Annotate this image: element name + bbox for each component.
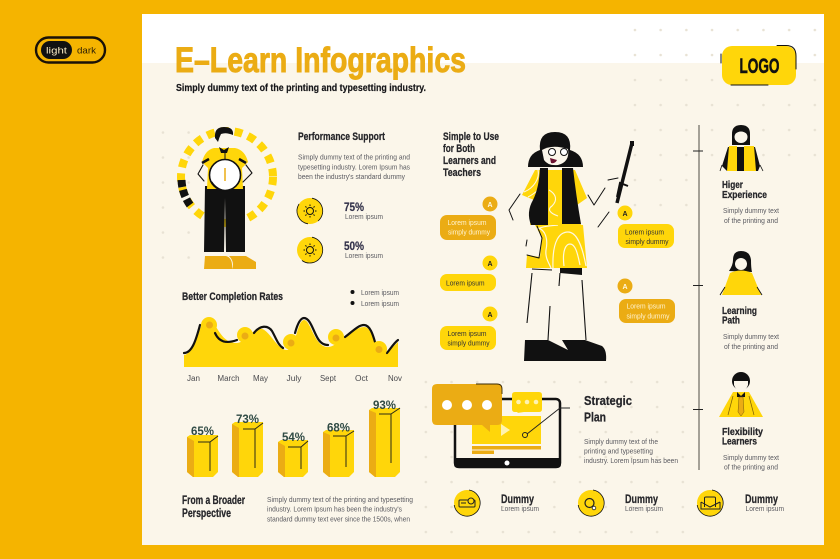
callout: left top [440,196,498,240]
callout: left middle: Lorem ipsum [446,278,485,288]
dummy label 2 [625,494,663,513]
heading [722,306,757,326]
arms [509,194,542,258]
small bubble [512,392,542,413]
main panel [142,14,824,545]
description: Simply dummy text [723,206,779,215]
performance support text: typesetting industry. Lorem Ipsum has [298,162,410,172]
callout: left bottom: simply dummy [448,338,490,348]
vest [529,168,581,225]
description [723,453,779,472]
broader perspective heading [182,495,245,520]
bar 65 percent: 65% [191,424,214,438]
logo badge: LOGO [740,55,780,78]
trousers [204,186,245,252]
callout: left middle: A [488,261,493,268]
light dark toggle [36,38,105,62]
broader perspective text [267,495,413,524]
simple to use heading [443,131,499,179]
heading: Experience [722,190,767,201]
heading: Learning [722,306,757,317]
bar 68 percent [323,420,354,477]
heading [722,180,767,201]
light dark toggle: light [46,46,67,56]
callout: left top: simply dummy [448,228,490,236]
chart month labels: Oct [355,374,369,383]
description: Simply dummy text [723,332,779,341]
pointer line [527,408,570,434]
performance support text: Simply dummy text of the printing and [298,152,410,162]
bar 54 percent [278,430,308,477]
arms [198,165,252,182]
chart month labels: Jan [187,374,200,383]
progress ring [181,131,273,223]
chart legend: Lorem ipsum [361,299,399,308]
bar 54 percent: 54% [282,430,305,444]
icon: projector [454,490,480,516]
dummy label 1: Dummy [501,494,534,506]
strategic plan heading: Plan [584,410,606,424]
icon: envelope [697,490,723,516]
heading: Higer [722,180,743,191]
area chart heading: Better Completion Rates [182,291,283,303]
chart month labels [187,374,402,383]
dummy label 3: Lorem ipsum [746,504,784,513]
simple to use heading: Learners and [443,155,496,167]
dummy label 1: Lorem ipsum [501,504,539,513]
dummy label 2: Lorem ipsum [625,504,663,513]
strategic plan heading [584,393,632,424]
simple to use heading: Simple to Use [443,131,499,143]
chart legend [350,288,399,308]
skirt [526,225,587,268]
strategic plan text: printing and typesetting [584,446,653,456]
strategic plan text [584,437,678,465]
description: of the printing and [724,216,778,225]
callout: right bottom: A [622,284,628,291]
callout: left bottom [440,306,498,350]
shirt [522,170,587,225]
callout: right top [618,206,674,248]
description: of the printing and [724,462,778,472]
bar 73 percent: 73% [236,412,259,426]
stat 75 percent [344,200,383,221]
icon: clock search [578,490,604,516]
callout: right bottom: simply dummy [626,312,670,320]
dummy label 3 [745,494,784,513]
stat 50 percent [344,239,383,260]
bar chart [187,398,400,477]
persona: higher experience [720,125,779,225]
big bubble [432,384,502,432]
bar 93 percent [369,398,400,477]
chart month labels: July [286,374,302,383]
description [723,332,779,351]
persona: flexibility learners [719,372,779,472]
strategic plan text: industry. Lorem Ipsum has been [584,456,678,465]
video frame [472,416,541,444]
area chart [184,317,398,367]
heading [722,427,763,448]
bar 73 percent [232,412,263,477]
trouser lines [527,269,586,340]
light dark toggle: dark [77,46,96,56]
broader perspective text: Simply dummy text of the printing and typesetting [267,495,413,504]
performance support text [298,152,410,181]
simple to use heading: Teachers [443,167,481,179]
chart month labels: March [218,374,240,383]
heading: Learners [722,436,757,448]
stat 75 percent: Lorem ipsum [345,212,383,221]
heading: Path [722,316,740,326]
callout: left middle [440,256,498,291]
face [542,147,568,165]
strategic plan heading: Strategic [584,393,632,408]
chart legend: Lorem ipsum [361,288,399,297]
illustration: teacher with pointer [509,132,634,361]
performance support heading: Performance Support [298,131,385,143]
simple to use heading: for Both [443,143,475,155]
title: E–Learn Infographics [175,41,466,80]
description: of the printing and [724,342,778,351]
callout: right top: Lorem ipsum [625,228,664,236]
shirt [202,148,248,189]
callout: left top: Lorem ipsum [448,218,487,227]
callout: right top: simply dummy [626,237,669,246]
subtitle: Simply dummy text of the printing and typesetting industry. [176,82,426,94]
description: Simply dummy text [723,453,779,462]
stat 50 percent: 50% [344,239,364,253]
callout: right bottom: Lorem ipsum [626,302,666,310]
callout: right bottom [618,278,675,323]
performance support text: been the industry's standard dummy [298,172,405,181]
broader perspective text: standard dummy text ever since the 1500s, when [267,514,410,524]
bar 93 percent: 93% [373,398,396,412]
callout: left bottom: Lorem ipsum [448,329,487,338]
strategic plan text: Simply dummy text of the [584,437,658,446]
tablet [455,399,560,467]
hand and pointer [617,143,632,203]
hair [528,132,583,167]
persona: learning path [720,251,779,351]
heading: Flexibility [722,427,763,438]
illustration: tablet with speech bubbles [432,384,570,468]
bar 68 percent: 68% [327,420,350,434]
icon: sun 50 [297,237,323,263]
shoes [204,256,256,269]
broader perspective heading: Perspective [182,508,231,520]
stat 50 percent: Lorem ipsum [345,251,383,260]
chart month labels: Nov [388,374,402,383]
callout: right top: A [622,211,628,218]
broader perspective text: industry. Lorem Ipsum has been the industry's [267,504,402,514]
icon: sun 75 [297,198,323,224]
dummy label 2: Dummy [625,494,658,506]
stat 75 percent: 75% [344,200,364,214]
avatar [720,251,762,295]
callout: left top: A [488,202,493,209]
callout: left bottom: A [488,312,493,319]
illustration: man holding clock [181,127,273,269]
chart month labels: May [253,374,268,383]
avatar [720,125,763,171]
chart month labels: Sept [320,374,337,383]
head [216,130,232,146]
clock [210,160,240,190]
logo badge [721,46,796,85]
shoes [524,340,606,361]
description [723,206,779,225]
broader perspective heading: From a Broader [182,495,245,507]
dummy label 1 [501,494,539,513]
timeline [693,125,703,470]
bar 65 percent [187,424,218,477]
avatar [719,372,763,417]
dummy label 3: Dummy [745,494,778,506]
